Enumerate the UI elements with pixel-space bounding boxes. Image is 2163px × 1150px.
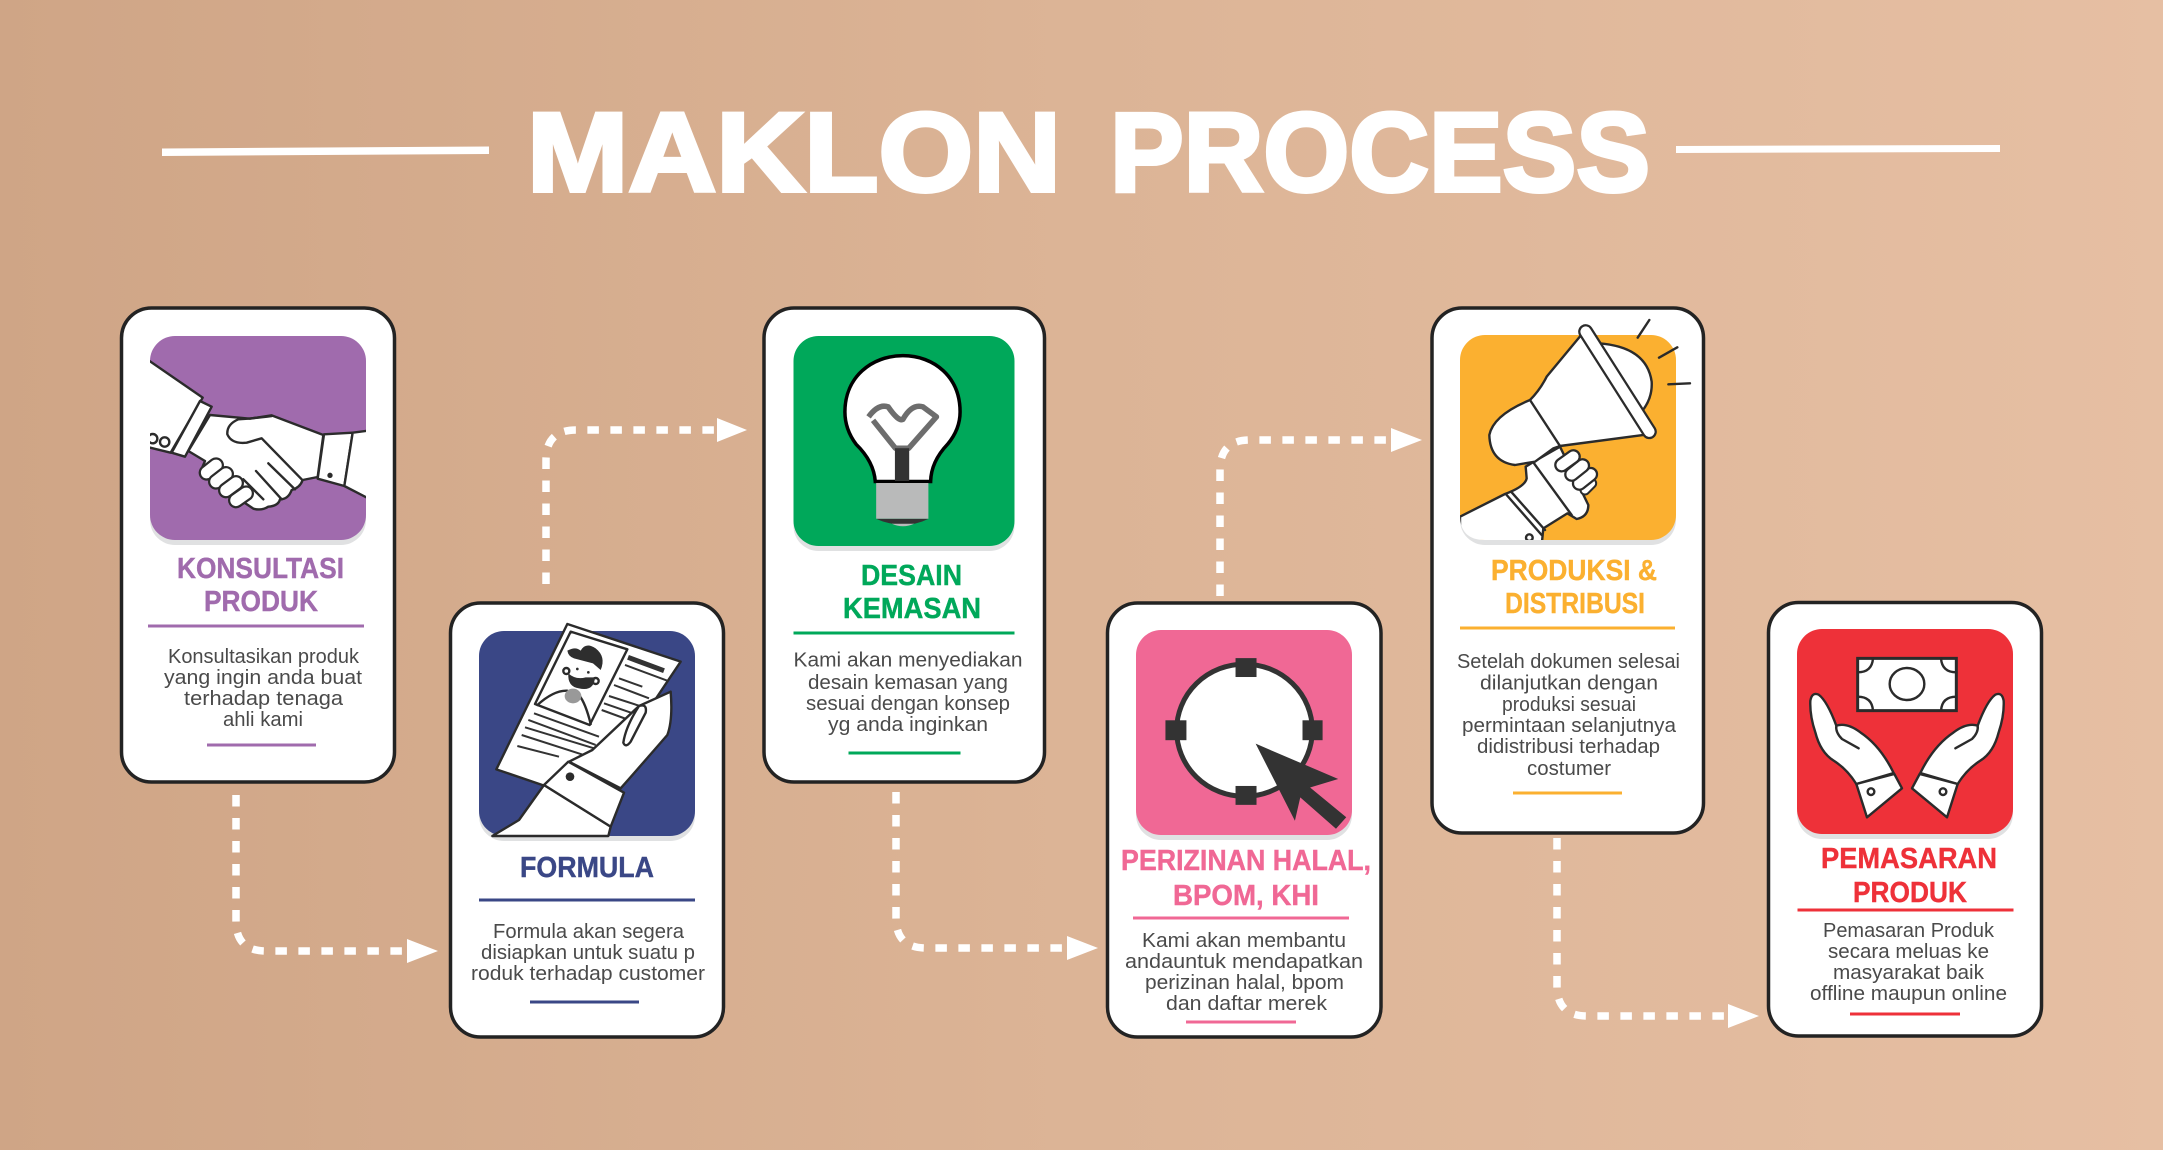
heading: Konsultasi Produk (177, 553, 344, 618)
arrow: step 4 to step 5 (1220, 428, 1422, 596)
text: description: desain kemasan yang (808, 672, 1008, 694)
heading: Pemasaran Produk: PEMASARAN (1821, 843, 1997, 875)
text: description: didistribusi terhadap (1477, 736, 1660, 758)
text: description: permintaan selanjutnya (1462, 715, 1677, 737)
text: description: yang ingin anda buat (164, 667, 362, 689)
heading: Produksi dan Distribusi (1491, 555, 1657, 620)
text: description: terhadap tenaga (184, 688, 344, 710)
heading: Produksi dan Distribusi: DISTRIBUSI (1505, 588, 1645, 620)
text: description (1125, 930, 1363, 1015)
text: description: Setelah dokumen selesai (1457, 651, 1680, 673)
heading: Konsultasi Produk: PRODUK (204, 586, 318, 618)
heading: Pemasaran Produk: PRODUK (1853, 877, 1967, 909)
arrow: step 2 to step 3 (546, 418, 747, 584)
title: Maklon Process with side rules: MAKLON (527, 90, 1061, 215)
text: description: Formula akan segera (493, 921, 685, 943)
heading: Produksi dan Distribusi: PRODUKSI & (1491, 555, 1657, 587)
icon: light bulb (845, 356, 960, 526)
arrow: step 3 to step 4 (896, 792, 1098, 960)
text: description: produksi sesuai (1502, 694, 1636, 716)
heading: Perizinan Halal, BPOM, KHI: BPOM, KHI (1173, 880, 1319, 912)
text: description: secara meluas ke (1828, 941, 1989, 963)
heading: Perizinan Halal, BPOM, KHI: PERIZINAN HALAL, (1121, 845, 1371, 877)
text: description: Pemasaran Produk (1823, 920, 1995, 942)
text: description (1457, 651, 1680, 780)
panel: step 4 Perizinan Halal (1108, 603, 1381, 1037)
text: description (1810, 920, 2007, 1005)
heading: Desain Kemasan: KEMASAN (843, 593, 981, 625)
text: description (794, 650, 1022, 736)
panel: step 1 Konsultasi Produk (122, 308, 394, 782)
text: description: dan daftar merek (1166, 993, 1328, 1015)
icon: hand holding CV document (492, 624, 681, 836)
heading: Perizinan Halal, BPOM, KHI (1121, 845, 1371, 912)
title: Maklon Process with side rules (162, 90, 2000, 215)
text: description: andauntuk mendapatkan (1125, 951, 1363, 973)
heading: Formula: FORMULA (520, 852, 654, 884)
icon: megaphone held by hand (1460, 320, 1690, 545)
arrow: step 5 to step 6 (1557, 838, 1759, 1028)
text: description: sesuai dengan konsep (806, 693, 1010, 715)
text: description: dilanjutkan dengan (1480, 672, 1658, 694)
heading: Desain Kemasan (843, 560, 981, 625)
text: description: roduk terhadap customer (471, 963, 705, 985)
text: description: ahli kami (223, 709, 303, 731)
text: description: costumer (1527, 758, 1611, 780)
icon: circle selection with cursor (1165, 658, 1346, 829)
text: description (164, 646, 362, 731)
panel: step 2 Formula (450, 603, 724, 1037)
panel: step 5 Produksi dan Distribusi (1432, 308, 1704, 833)
text: description: perizinan halal, bpom (1145, 972, 1344, 994)
text: description: Kami akan menyediakan (794, 650, 1022, 672)
icon: handshake (143, 357, 373, 509)
text: description: masyarakat baik (1833, 962, 1985, 984)
panel: step 3 Desain Kemasan (764, 308, 1044, 782)
text: description: offline maupun online (1810, 983, 2007, 1005)
heading: Konsultasi Produk: KONSULTASI (177, 553, 344, 585)
text: description (471, 921, 705, 985)
text: description: Kami akan membantu (1142, 930, 1346, 952)
heading: Pemasaran Produk (1821, 843, 1997, 909)
arrow: step 1 to step 2 (236, 795, 438, 963)
title: Maklon Process with side rules: PROCESS (1110, 90, 1650, 215)
icon: hands with banknote (1810, 658, 2004, 817)
heading: Desain Kemasan: DESAIN (861, 560, 962, 592)
panel: step 6 Pemasaran Produk (1768, 602, 2042, 1036)
text: description: Konsultasikan produk (168, 646, 360, 668)
text: description: disiapkan untuk suatu p (481, 942, 695, 964)
text: description: yg anda inginkan (828, 714, 988, 736)
